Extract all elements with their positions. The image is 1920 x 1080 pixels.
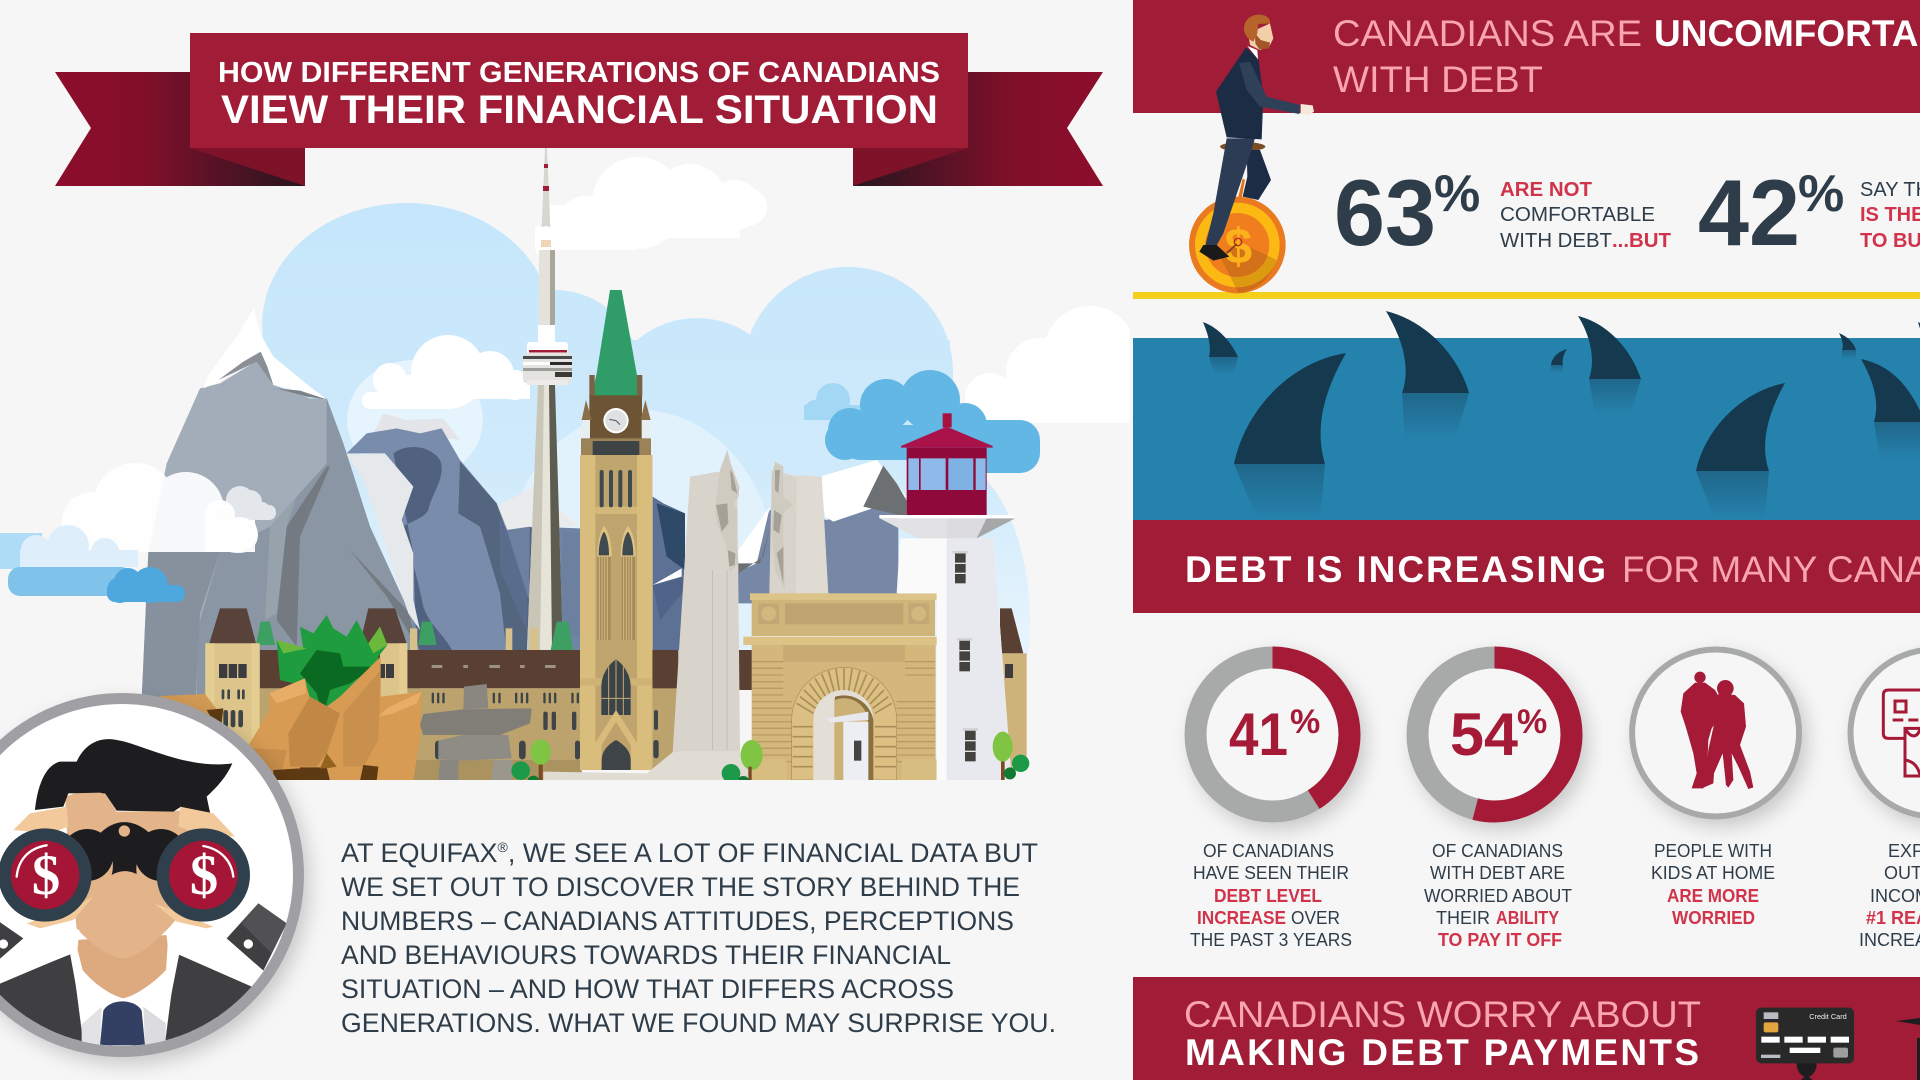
right lens	[157, 828, 250, 922]
post	[1238, 178, 1245, 198]
icon: businessman on coin unicycle	[1189, 15, 1314, 293]
grey mountain	[142, 360, 420, 700]
intro paragraph: NUMBERS – CANADIANS ATTITUDES, PERCEPTIONS	[341, 906, 1014, 936]
intro paragraph: SITUATION – AND HOW THAT DIFFERS ACROSS	[341, 974, 954, 1004]
stat: 42 percent: %	[1798, 165, 1844, 223]
rocks and tree	[160, 615, 551, 786]
man	[0, 739, 287, 1047]
intro paragraph: AND BEHAVIOURS TOWARDS THEIR FINANCIAL	[341, 940, 951, 970]
caption: 54 percent: WORRIED ABOUT	[1424, 886, 1572, 906]
right trees	[722, 732, 1029, 784]
fin reflections	[1209, 350, 1920, 520]
stat: 63 percent: %	[1434, 165, 1480, 223]
caption: 54 percent: WITH DEBT ARE	[1430, 863, 1565, 883]
stat: 42 percent	[1698, 160, 1920, 265]
slit windows	[600, 470, 632, 507]
donut chart: 41 percent	[1196, 658, 1350, 812]
cloud: small grey	[226, 486, 276, 520]
caption: people with kids: KIDS AT HOME	[1651, 863, 1775, 883]
shoe	[1199, 245, 1229, 261]
cloud: left foreground	[148, 472, 257, 553]
caption: people with kids	[1651, 841, 1775, 928]
caption: 54 percent: THEIR	[1436, 908, 1490, 928]
opening	[813, 690, 873, 780]
icon: credit card	[1756, 1008, 1854, 1080]
header text: CANADIANS ARE	[1333, 13, 1642, 54]
panel: uncomfortable with debt header: WITH DEBT	[1333, 59, 1543, 100]
intro paragraph: ®	[498, 839, 509, 855]
collar shade	[82, 1007, 102, 1047]
carving shadows	[716, 470, 783, 583]
stat: 63 percent	[1334, 160, 1671, 265]
sleeves and cuffs	[0, 920, 23, 962]
cloud: pale halo	[347, 360, 483, 462]
panel: debt is increasing header	[1133, 520, 1920, 613]
inukshuk	[463, 684, 488, 709]
white snow cap	[203, 308, 327, 399]
hair	[35, 739, 232, 813]
cloud: white mid	[362, 335, 530, 409]
second tower	[360, 608, 407, 643]
Peace Tower	[580, 290, 652, 770]
cloud: blue behind lighthouse	[804, 370, 1040, 473]
donut chart: 54 percent: %	[1517, 703, 1547, 741]
dark grey peak	[218, 352, 273, 385]
panel: water with shark fins	[1133, 311, 1920, 520]
cloud: lower pale sky	[522, 410, 766, 656]
front leg	[1205, 138, 1255, 248]
voussoirs	[792, 667, 897, 780]
intro paragraph: WE SET OUT TO DISCOVER THE STORY BEHIND THE	[341, 872, 1020, 902]
shirt	[70, 933, 180, 1047]
clock	[603, 408, 629, 433]
caption: 41 percent	[1190, 841, 1352, 950]
caption: 54 percent: OF CANADIANS	[1432, 841, 1563, 861]
rocks	[247, 657, 422, 781]
mountains (traced from the reference)	[142, 308, 580, 700]
Vimy memorial	[543, 450, 828, 780]
icon: card and glass in circle	[1850, 650, 1920, 816]
caption: people with kids: PEOPLE WITH	[1654, 841, 1772, 861]
jacket	[1216, 47, 1263, 139]
panel: worry about debt payments: CANADIANS WORRY ABOUT	[1184, 994, 1701, 1035]
seat	[1220, 142, 1265, 151]
illustration: Canadian landmarks	[0, 148, 1136, 790]
Parliament buildings	[205, 608, 582, 788]
green turrets	[256, 622, 573, 650]
yellow tightrope	[1133, 292, 1920, 299]
cloud: right white	[965, 306, 1136, 423]
panel: worry about debt payments	[1133, 977, 1920, 1080]
arched windows	[597, 526, 612, 557]
left lens	[0, 828, 92, 922]
small white building	[827, 712, 868, 723]
green tree	[539, 760, 543, 781]
caption: people with kids: WORRIED	[1672, 908, 1755, 928]
icon: credit card: Credit Card	[1809, 1012, 1847, 1021]
coin	[1189, 197, 1286, 293]
large window	[601, 659, 631, 715]
icon: couple silhouette in circle	[1632, 650, 1799, 816]
tie	[100, 1001, 145, 1045]
beard	[1255, 33, 1270, 49]
snow streak	[347, 453, 420, 630]
panel: uncomfortable with debt header	[1133, 0, 1920, 113]
facade windows	[222, 689, 580, 759]
banner body	[190, 33, 968, 148]
intro paragraph: GENERATIONS. WHAT WE FOUND MAY SURPRISE YOU.	[341, 1008, 1056, 1038]
head	[65, 785, 213, 958]
stat: 42 percent: 42	[1698, 160, 1800, 265]
right ribbon tail	[853, 72, 1103, 186]
far mountains right	[499, 460, 907, 650]
caption: 41 percent: OVER	[1291, 908, 1340, 928]
clock section	[589, 395, 642, 439]
neck and face	[1248, 23, 1273, 50]
pendant below card	[1797, 1062, 1817, 1077]
icon: businessman on coin unicycle: $	[1224, 218, 1252, 274]
intro paragraph: , WE SEE A LOT OF FINANCIAL DATA BUT	[508, 838, 1038, 868]
memorial arch	[743, 593, 945, 780]
panel: debt is increasing header: DEBT IS INCREASING	[1185, 549, 1606, 590]
stat: 63 percent: 63	[1334, 160, 1436, 265]
caption: 54 percent: ABILITY	[1496, 908, 1559, 928]
man: $	[190, 845, 218, 907]
stat: 63 percent: WITH DEBT	[1500, 230, 1612, 252]
neck	[75, 935, 168, 998]
caption: 54 percent: TO PAY IT OFF	[1438, 930, 1562, 950]
stat: 63 percent: ARE NOT	[1500, 179, 1592, 201]
sky shapes	[262, 203, 1030, 790]
suit	[0, 953, 83, 1043]
CN Tower	[523, 148, 572, 650]
left fold	[190, 148, 305, 186]
right wing of parliament	[652, 608, 1027, 772]
facade	[205, 688, 582, 772]
cloud: white over grey	[218, 500, 258, 553]
icon: graduation cap	[1896, 1018, 1920, 1080]
caption: 41 percent: HAVE SEEN THEIR	[1193, 863, 1349, 883]
caption: people with kids: ARE MORE	[1667, 886, 1759, 906]
clouds: blue left	[0, 525, 185, 603]
lighthouse windows	[955, 553, 976, 761]
lantern	[943, 413, 952, 427]
steps	[543, 752, 757, 780]
donut chart: 41 percent: 41	[1229, 701, 1288, 768]
collar	[1247, 46, 1258, 59]
hair	[1244, 15, 1270, 42]
carved figures	[715, 450, 739, 572]
caption: 41 percent: INCREASE	[1197, 908, 1286, 928]
heading line 2: VIEW THEIR FINANCIAL SITUATION	[221, 88, 938, 132]
cloud: top white	[535, 157, 767, 250]
caption: 54 percent	[1424, 841, 1572, 950]
caption: fourth statistic	[1859, 841, 1920, 950]
donut chart: 41 percent: %	[1290, 703, 1320, 741]
tree	[277, 615, 387, 722]
hands	[13, 807, 68, 833]
hand	[1301, 104, 1314, 115]
heading line 1: HOW DIFFERENT GENERATIONS OF CANADIANS	[218, 57, 940, 89]
back leg	[1243, 150, 1271, 200]
caption: 41 percent: THE PAST 3 YEARS	[1190, 930, 1352, 950]
intro paragraph	[341, 838, 1056, 1038]
right fold	[853, 148, 968, 186]
arm	[1239, 62, 1300, 114]
roof band	[260, 650, 580, 688]
shaft	[595, 455, 652, 743]
far right mountain	[531, 527, 580, 650]
caption: 41 percent: DEBT LEVEL	[1214, 886, 1322, 906]
title banner	[55, 33, 1103, 186]
blue mountain	[347, 428, 530, 653]
west tower	[209, 608, 256, 643]
stat: 63 percent: COMFORTABLE	[1500, 204, 1655, 226]
chimneys	[410, 628, 538, 650]
man: $	[32, 845, 60, 907]
caption: 41 percent: OF CANADIANS	[1203, 841, 1334, 861]
gable door	[595, 710, 637, 770]
lighthouse	[879, 413, 1015, 780]
binoculars body	[61, 829, 113, 881]
portrait circle: man with binoculars	[0, 698, 298, 1052]
circle frame	[0, 698, 298, 1052]
shark fins	[1203, 311, 1920, 471]
green spire	[594, 290, 637, 396]
donut chart: 54 percent: 54	[1450, 701, 1519, 768]
panel: worry about debt payments: MAKING DEBT PAYMENTS	[1185, 1032, 1699, 1073]
stat: 63 percent: ...BUT	[1612, 230, 1671, 252]
intro paragraph: AT EQUIFAX	[341, 838, 498, 868]
left ribbon tail	[55, 72, 305, 186]
donut chart: 54 percent	[1418, 658, 1572, 812]
